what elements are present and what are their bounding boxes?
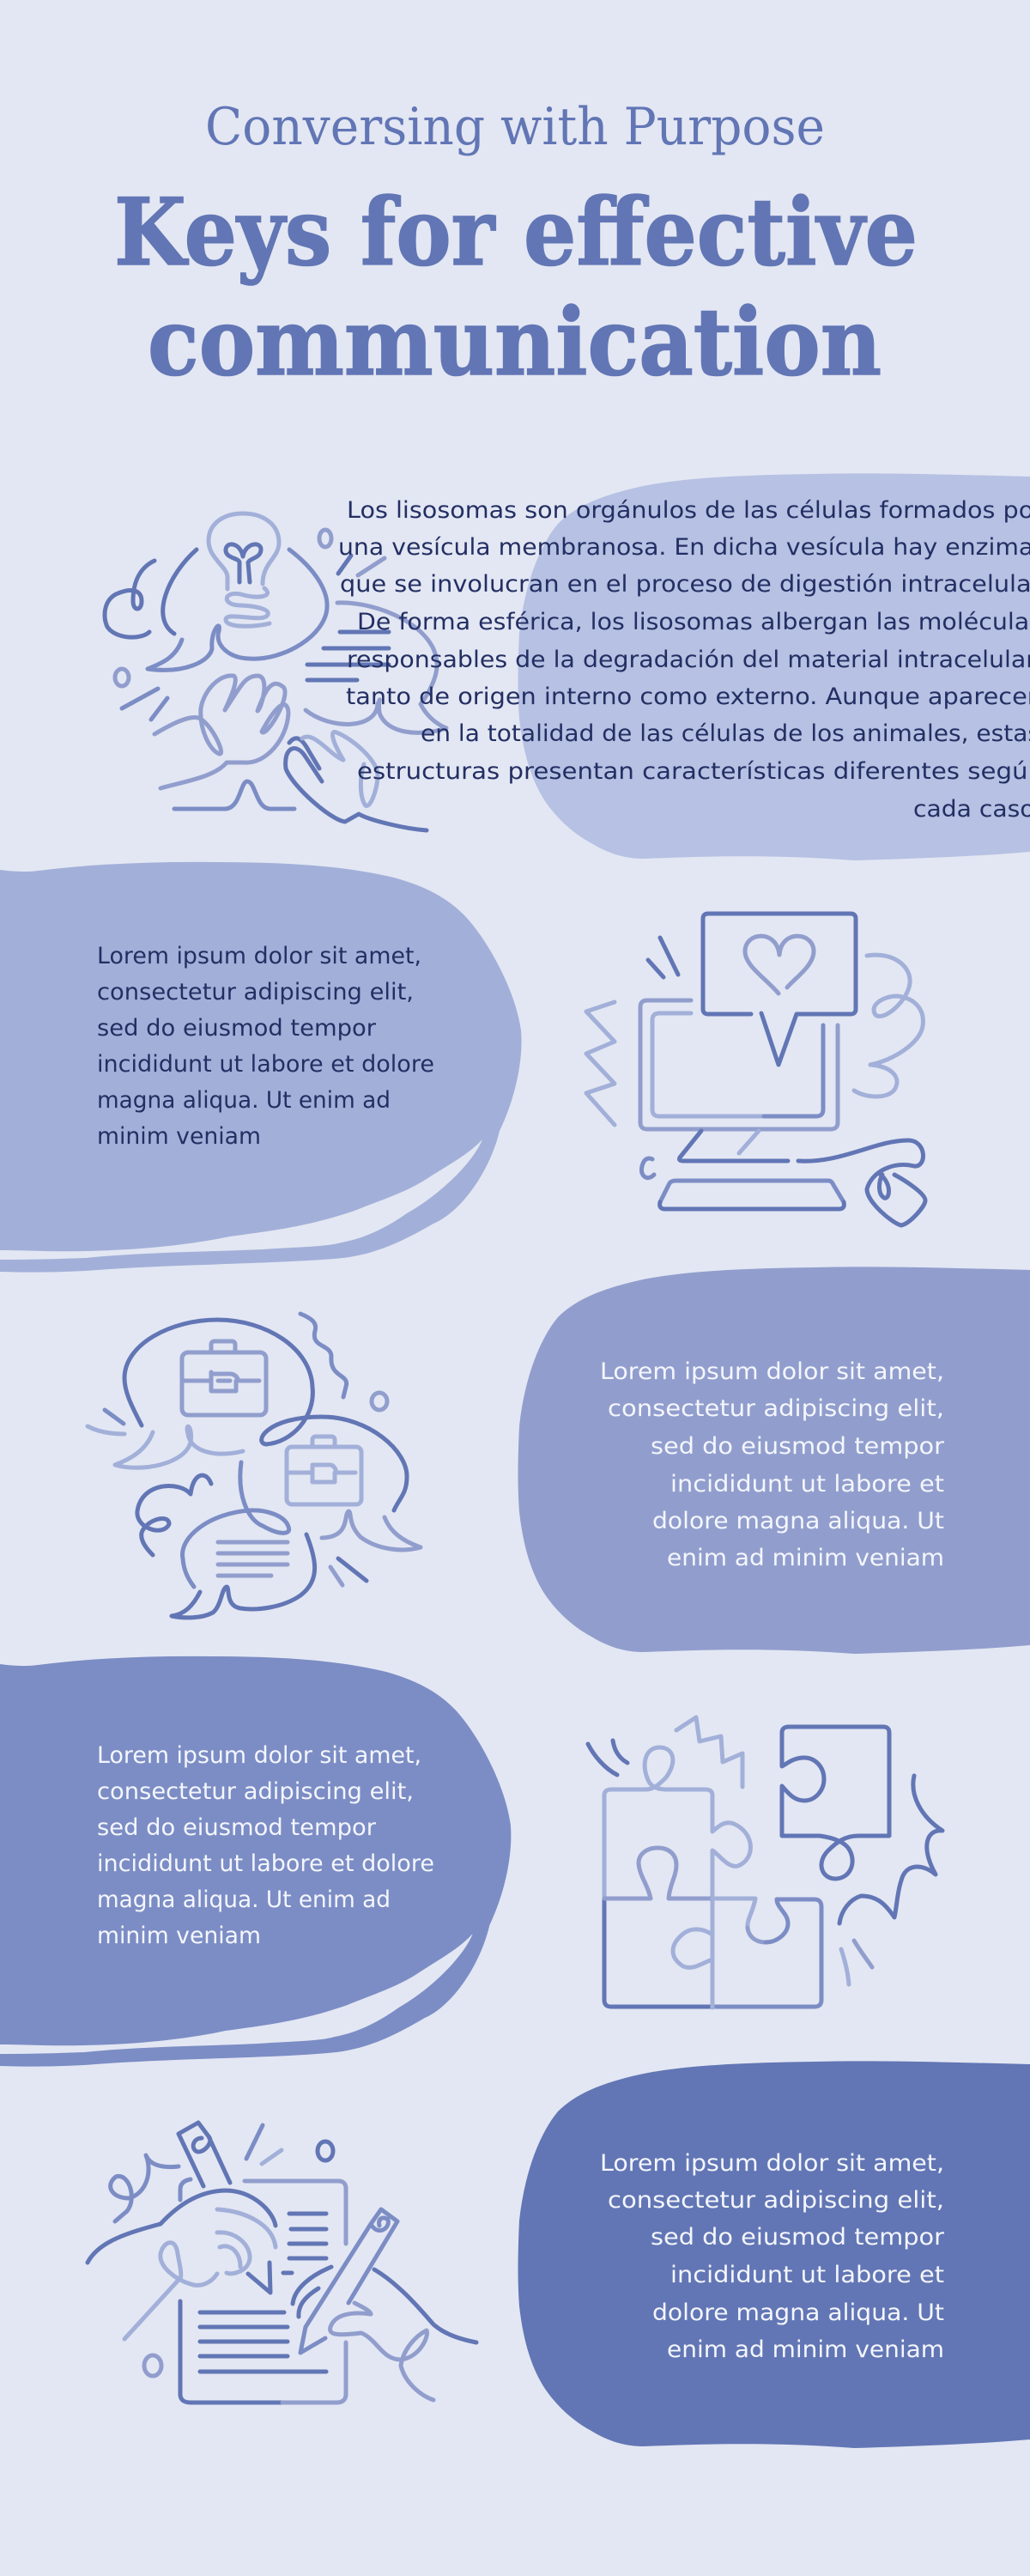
text block 3: sed do eiusmod tempor	[651, 1433, 945, 1460]
text block 1: que se involucran en el proceso de digestión intracelular.	[340, 571, 1030, 598]
text block 2	[97, 943, 434, 1150]
text block 4: Lorem ipsum dolor sit amet,	[97, 1742, 421, 1769]
text block 3: incididunt ut labore et	[670, 1471, 944, 1498]
icon: puzzle pieces	[588, 1717, 942, 2008]
panel: blob 1	[518, 473, 1030, 860]
text block 1: estructuras presentan características diferentes según	[357, 758, 1030, 785]
panel: blob 3	[518, 1267, 1030, 1654]
text block 1	[338, 497, 1030, 823]
text block 1: responsables de la degradación del material intracelular,	[347, 647, 1030, 673]
text block 3: dolore magna aliqua. Ut	[652, 1508, 944, 1534]
text block 1: en la totalidad de las células de los animales, estas	[421, 720, 1030, 747]
text block 2: sed do eiusmod tempor	[97, 1015, 377, 1042]
text block 3	[600, 1358, 945, 1571]
title	[114, 179, 918, 397]
text block 3: consectetur adipiscing elit,	[608, 1395, 944, 1422]
text block 4: consectetur adipiscing elit,	[97, 1778, 414, 1805]
text block 4: minim veniam	[97, 1923, 261, 1949]
text block 2: magna aliqua. Ut enim ad	[97, 1087, 391, 1114]
icon: speech bubbles with briefcases	[88, 1314, 421, 1618]
text block 4: sed do eiusmod tempor	[97, 1814, 377, 1841]
text block 3: enim ad minim veniam	[667, 1545, 944, 1571]
title: Keys for effective	[114, 179, 918, 287]
text block 1: De forma esférica, los lisosomas albergan las moléculas	[357, 609, 1030, 635]
text block 5: sed do eiusmod tempor	[651, 2224, 945, 2251]
panel: blob 2	[0, 862, 522, 1273]
text block 4: magna aliqua. Ut enim ad	[97, 1886, 391, 1913]
text block 5: enim ad minim veniam	[667, 2336, 944, 2363]
text block 4	[97, 1742, 434, 1949]
icon: documents and pens	[88, 2123, 476, 2403]
text block 5	[600, 2150, 945, 2363]
panel: blob 4	[0, 1656, 511, 2067]
icon: lightbulb and hands	[105, 513, 446, 830]
text block 1: Los lisosomas son orgánulos de las células formados por	[347, 497, 1030, 524]
text block 3: Lorem ipsum dolor sit amet,	[600, 1358, 944, 1385]
text block 1: una vesícula membranosa. En dicha vesícula hay enzimas	[338, 534, 1030, 561]
text block 5: consectetur adipiscing elit,	[608, 2187, 944, 2214]
text block 4: incididunt ut labore et dolore	[97, 1850, 434, 1877]
text block 2: consectetur adipiscing elit,	[97, 979, 414, 1005]
text block 5: incididunt ut labore et	[670, 2262, 944, 2288]
subtitle: Conversing with Purpose	[205, 97, 825, 157]
text block 2: Lorem ipsum dolor sit amet,	[97, 943, 421, 969]
text block 2: incididunt ut labore et dolore	[97, 1051, 434, 1078]
icon: computer with heart bubble	[586, 914, 925, 1225]
text block 1: tanto de origen interno como externo. Aunque aparecen	[346, 683, 1030, 710]
text block 2: minim veniam	[97, 1123, 261, 1150]
text block 5: dolore magna aliqua. Ut	[652, 2300, 944, 2326]
title: communication	[148, 289, 882, 397]
text block 5: Lorem ipsum dolor sit amet,	[600, 2150, 944, 2177]
panel: blob 5	[518, 2061, 1030, 2448]
